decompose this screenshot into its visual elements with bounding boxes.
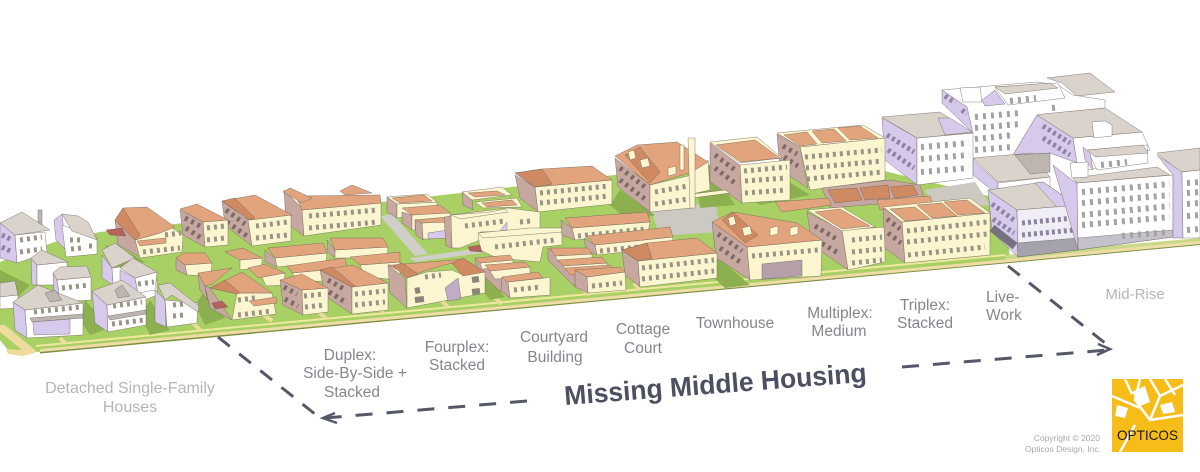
building: rear garages (176, 238, 400, 286)
label: live-work: Work (986, 307, 1022, 324)
building: triplex stacked (883, 198, 990, 263)
label: fourplex: Stacked (429, 357, 485, 374)
building: duplex stacked house (222, 195, 292, 246)
building: duplex small (280, 274, 328, 315)
building: townhouse row (622, 238, 717, 287)
logo: opticos: OPTICOS (1117, 427, 1178, 443)
building: back multiplex roofs (775, 180, 933, 212)
label: triplex: Stacked (897, 315, 953, 332)
logo: opticos (1112, 379, 1183, 452)
building: garage row lower (584, 227, 673, 255)
building: craftsman duplex (106, 207, 183, 258)
building: multiplex front left rear (710, 137, 790, 203)
label: townhouse: Townhouse (696, 315, 774, 332)
arrow: left bracket (218, 337, 527, 423)
building: multiplex small front (712, 212, 822, 280)
label: live-work: Live- (986, 289, 1020, 306)
arrow: right bracket (902, 266, 1110, 367)
label: duplex: Side-By-Side + (303, 365, 407, 382)
building: mid-rise main block (1053, 145, 1173, 250)
label: multiplex: Multiplex: (807, 305, 873, 322)
building: fourplex stacked (388, 258, 485, 308)
building: courtyard units rear (387, 187, 522, 240)
label: courtyard: Courtyard (520, 329, 588, 346)
label: duplex: Duplex: (324, 347, 376, 364)
ground: green block (0, 165, 1200, 356)
label: cottage court: Cottage (616, 321, 670, 338)
building: white house gambrel (54, 214, 97, 257)
copyright: Opticos Design, Inc. (1025, 444, 1101, 454)
building: small stub at left edge (0, 281, 18, 309)
building: square house (180, 204, 228, 247)
label: cottage court: Court (624, 340, 663, 357)
label: duplex: Stacked (324, 384, 380, 401)
building: courtyard main block (444, 208, 562, 262)
building: white house row two left (31, 250, 91, 302)
heading: missing middle housing: Missing Middle Housing (563, 358, 868, 411)
label: detached houses: Houses (103, 399, 157, 416)
building: mid-rise right block (1157, 148, 1200, 238)
building: duplex side by side large (320, 265, 388, 314)
building: white house pair centre (102, 243, 157, 300)
building: orange bungalow duplex (198, 268, 277, 320)
building: live-work corner block (988, 182, 1078, 257)
building: gray house with chimney (155, 283, 199, 327)
building: cottage court left units (475, 255, 550, 298)
label: courtyard: Building (527, 349, 583, 366)
label: triplex: Triplex: (900, 297, 950, 314)
copyright: Copyright © 2020 (1034, 433, 1100, 443)
building: mid-rise left block (882, 112, 973, 185)
building: long house rear (283, 185, 381, 236)
label: detached houses: Detached Single-Family (45, 380, 215, 397)
building: cottage court right units (548, 248, 626, 293)
building: multiplex three storey rear (777, 125, 885, 190)
label: mid-rise: Mid-Rise (1105, 286, 1165, 303)
building: white house top left (0, 210, 50, 263)
building: courtyard mansion (615, 138, 730, 212)
building: mid-rise centre rear block (1013, 108, 1150, 170)
label: multiplex: Medium (811, 323, 867, 340)
building: multiplex medium (807, 207, 885, 270)
building: live-work flat roof block (973, 153, 1050, 195)
building: garage row upper (561, 212, 650, 240)
building: mid-rise back block (942, 73, 1115, 160)
label: fourplex: Fourplex: (425, 339, 489, 356)
building: courtyard wide house (515, 166, 612, 212)
building: gray foursquare centre (92, 280, 146, 332)
building: gray foursquare (13, 285, 83, 338)
